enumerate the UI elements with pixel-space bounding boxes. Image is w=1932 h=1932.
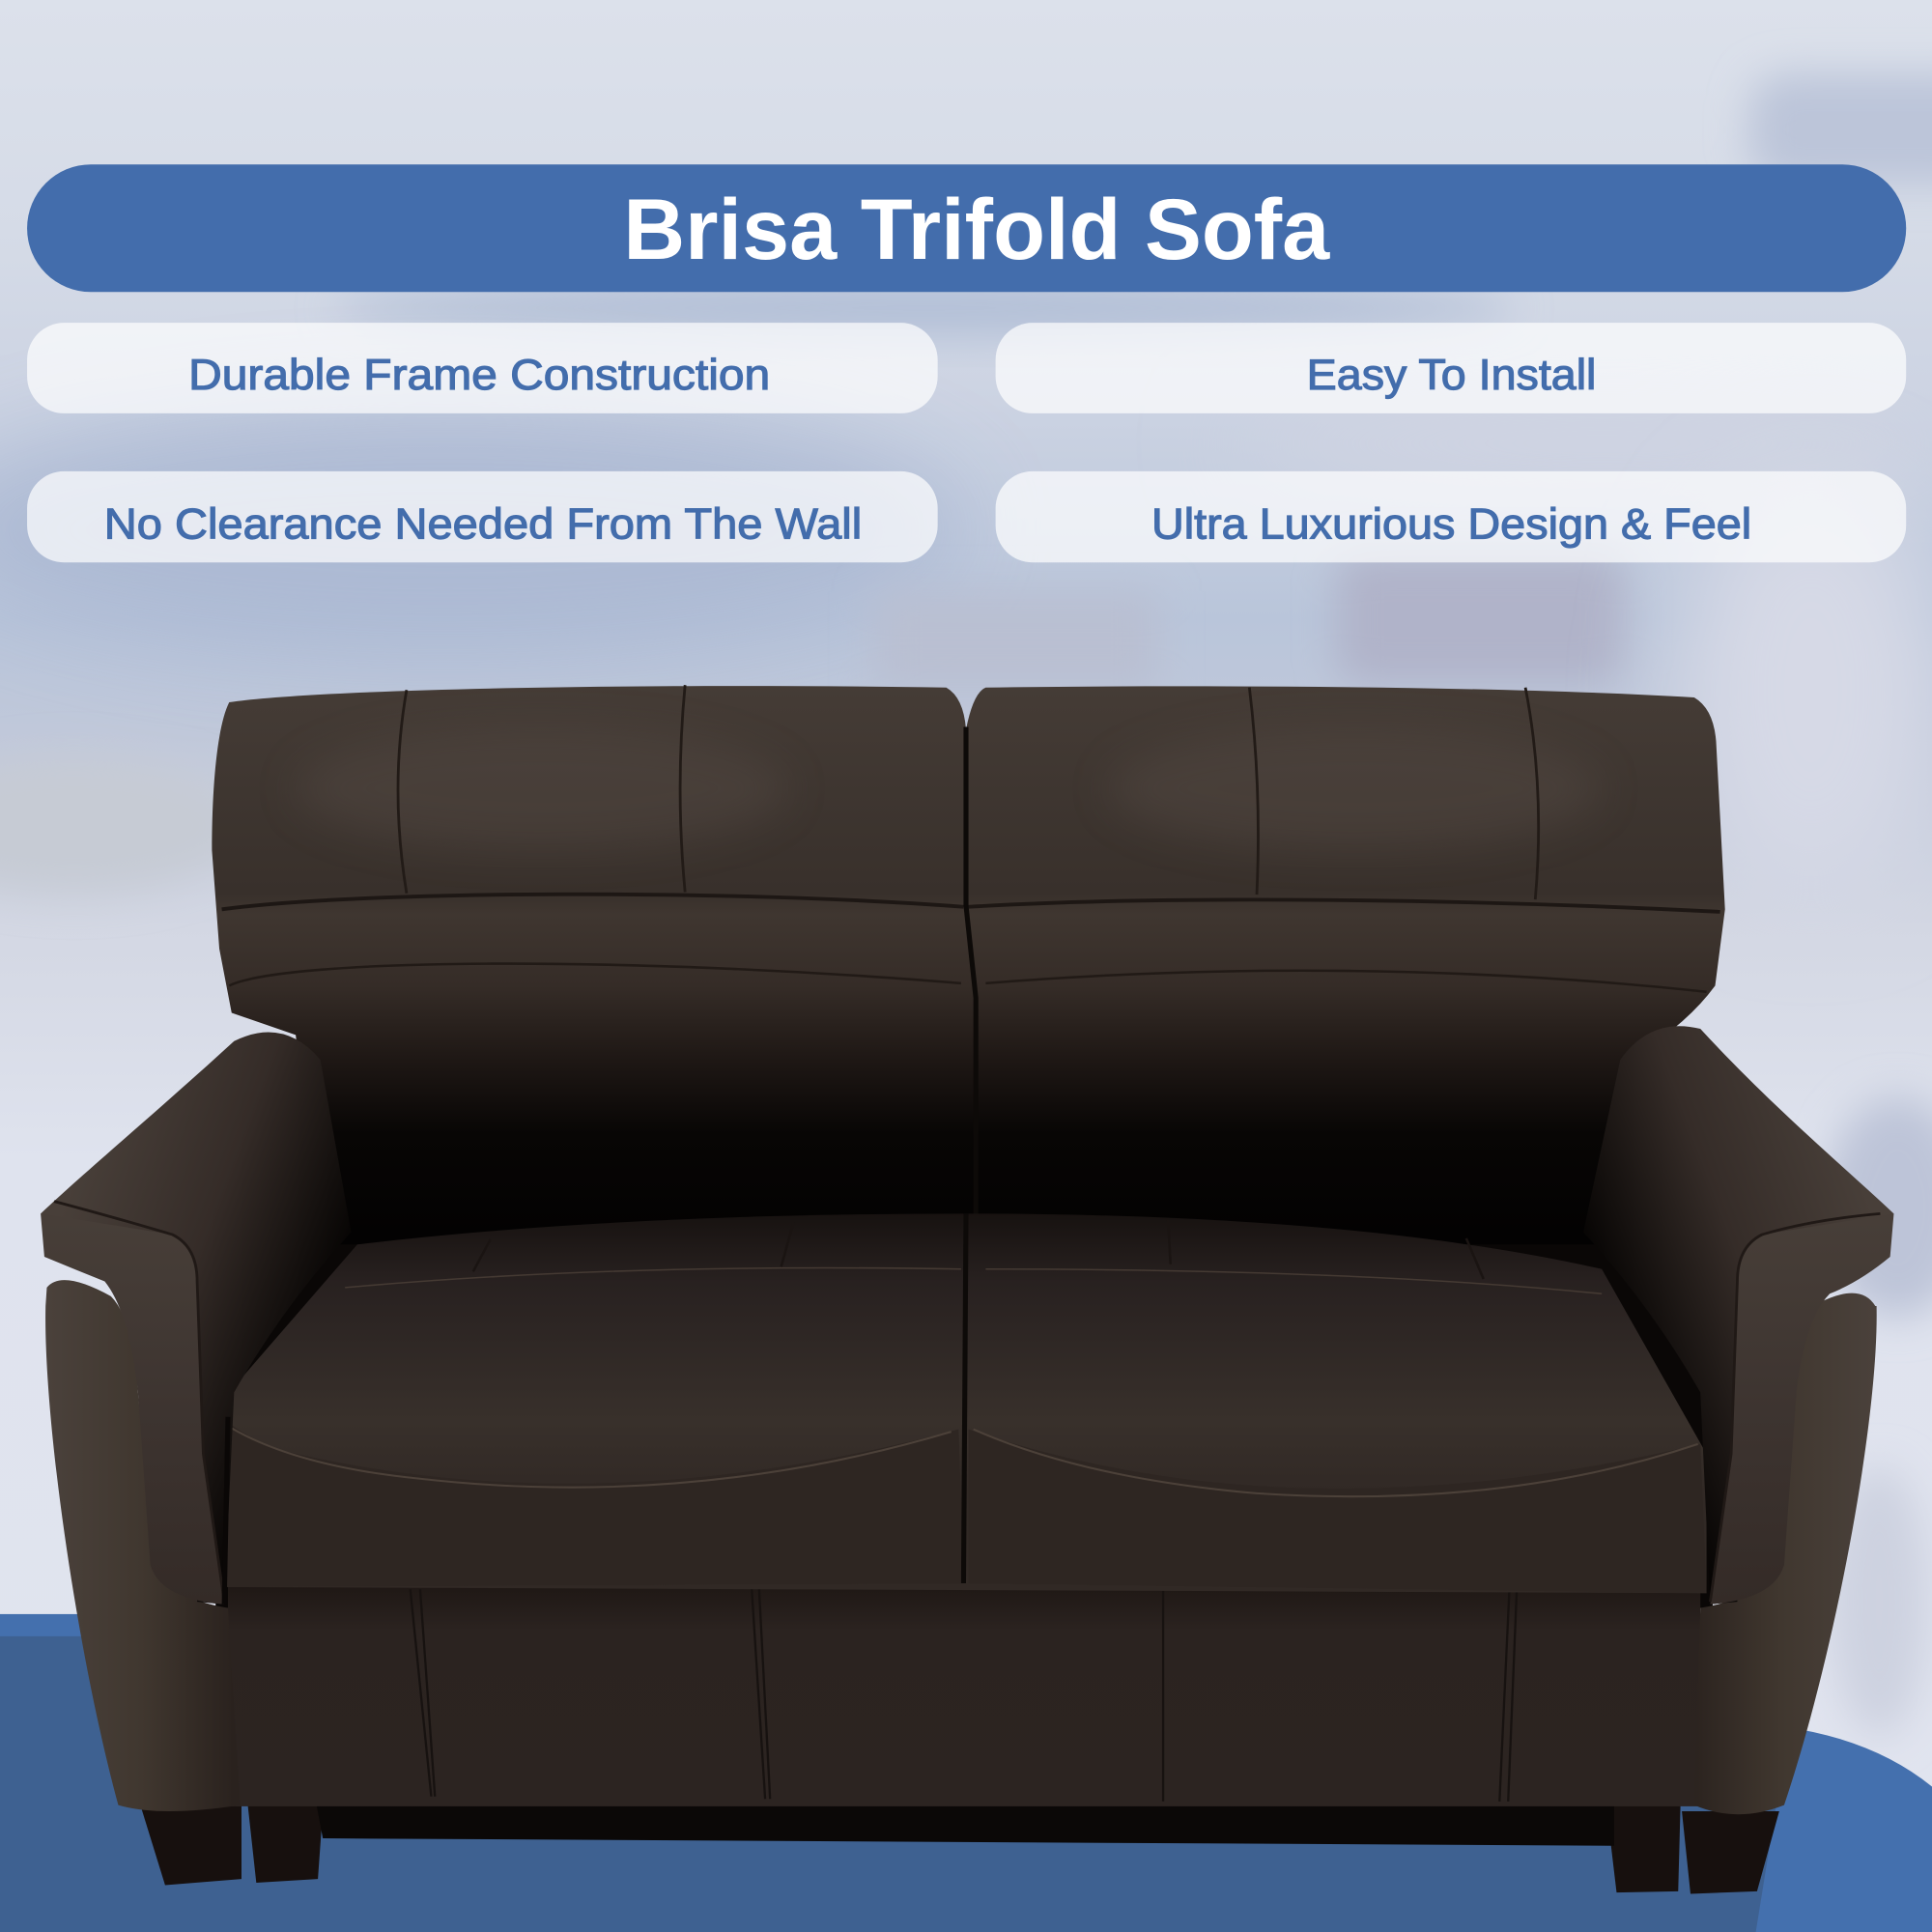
feature pill: ultra luxurious [996, 471, 1906, 562]
right arm [1583, 1026, 1893, 1814]
headrest crease and stitching [222, 685, 1720, 1220]
right arm top and inner side [1583, 1026, 1893, 1605]
left arm front face [41, 1213, 224, 1605]
headrest highlights [296, 727, 1602, 850]
seat cushions [222, 1213, 1707, 1593]
sofa legs [139, 1793, 1779, 1893]
sofa front base panel [228, 1584, 1700, 1806]
feature pill: easy to install: Easy To Install [1307, 352, 1596, 399]
feature pill: ultra luxurious: Ultra Luxurious Design & Feel [1151, 500, 1751, 548]
seat back [212, 685, 1725, 1244]
feature pill: durable frame: Durable Frame Construction [188, 352, 770, 399]
left arm top and inner side [41, 1033, 352, 1605]
right arm front face [1710, 1213, 1893, 1605]
feature pill: no clearance: No Clearance Needed From The Wall [104, 500, 862, 548]
floor: blue base with arc [0, 1614, 1932, 1932]
left arm outer panel [45, 1280, 241, 1811]
feature pill: easy to install [996, 323, 1906, 413]
feature pill: durable frame [27, 323, 938, 413]
title banner [27, 164, 1906, 292]
title banner: Brisa Trifold Sofa [623, 181, 1331, 277]
under-sofa shadow [314, 1793, 1614, 1846]
sofa illustration [41, 685, 1893, 1893]
right arm outer panel [1694, 1293, 1877, 1814]
feature pill: no clearance [27, 471, 938, 562]
left arm [41, 1033, 352, 1811]
dark underlay behind seat and arms [215, 1182, 1713, 1608]
